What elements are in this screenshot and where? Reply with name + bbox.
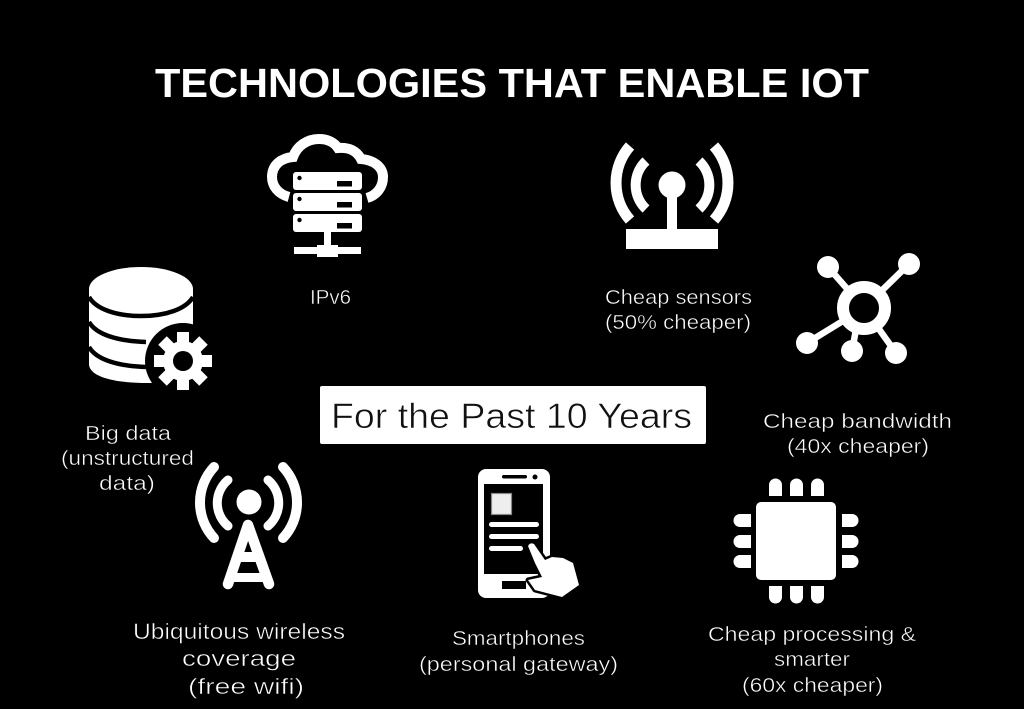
label: IPv6: IPv6 [310,287,351,309]
label: cheap processing [708,624,917,697]
label: ubiquitous wireless coverage: coverage [182,646,296,671]
callout: for the past 10 years: For the Past 10 Years [331,397,692,436]
callout: for the past 10 years [320,386,706,444]
icon: cloud server [272,139,383,257]
label: cheap sensors: (50% cheaper) [605,312,751,334]
label: big data: data) [99,473,155,495]
label: cheap bandwidth: Cheap bandwidth [763,411,952,433]
label: smartphones: Smartphones [452,628,585,650]
label: cheap processing: Cheap processing & [708,624,917,646]
label: ubiquitous wireless coverage: Ubiquitous wireless [133,619,345,644]
label: smartphones [419,628,618,676]
icon: processor chip [734,478,859,604]
label: smartphones: (personal gateway) [419,654,618,676]
label: big data: Big data [85,423,172,445]
icon: network hub [796,253,920,364]
label: cheap sensors: Cheap sensors [605,287,752,309]
label: big data [61,423,194,495]
label: cheap bandwidth [763,411,952,458]
icon: smartphone with hand [478,469,579,598]
title: TECHNOLOGIES THAT ENABLE IOT [155,60,869,106]
icon: sensor antenna [616,146,728,249]
label: ubiquitous wireless coverage [133,619,345,699]
label: cheap bandwidth: (40x cheaper) [787,436,929,458]
label: cheap sensors [605,287,752,334]
label: cheap processing: (60x cheaper) [742,675,883,697]
icon: wireless tower [200,467,297,584]
label: cheap processing: smarter [774,649,850,671]
label: big data: (unstructured [61,448,194,470]
label: ubiquitous wireless coverage: (free wifi) [188,674,304,699]
icon: database with gear [89,267,221,399]
